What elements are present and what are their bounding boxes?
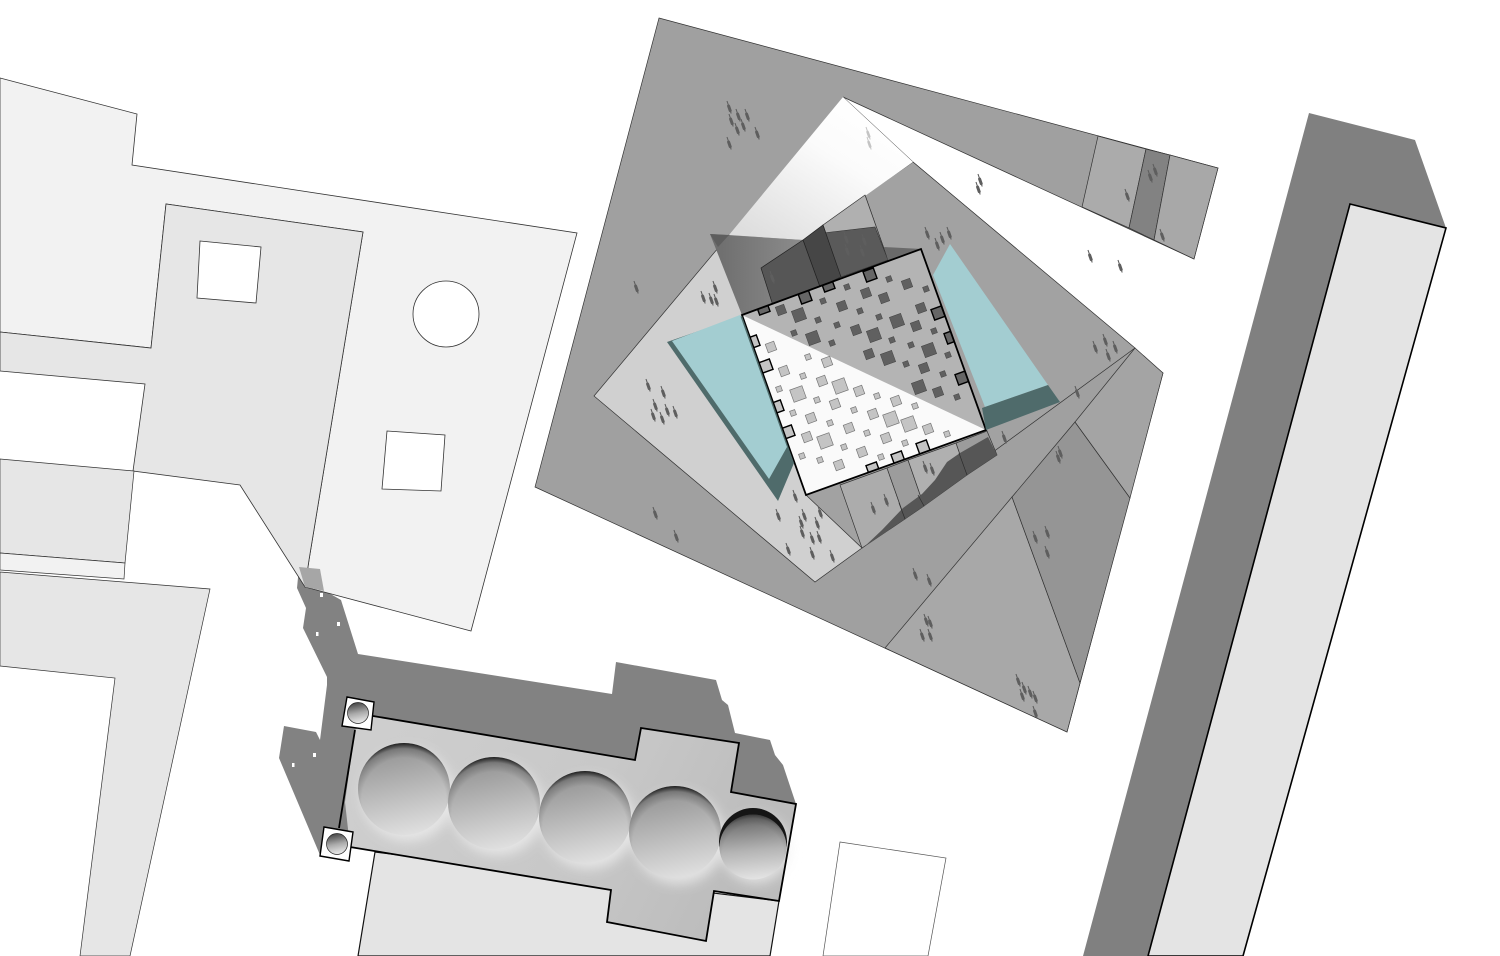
central roof [742,249,986,495]
dome 3 [539,771,631,863]
strip panel 3 [1154,155,1218,259]
south terrace panel 4 [956,431,997,475]
dome 4 [629,786,721,878]
courtyard: lower square [382,431,445,491]
grass tufts [634,101,1164,718]
central building with domes [339,716,796,941]
roof: white half [742,315,986,495]
corner tower: upper [342,697,374,730]
base ground [535,18,1218,732]
shadow on middle lawn [884,247,922,260]
water pool: right [933,244,1060,430]
block B [0,553,125,579]
terrace shaded panel [823,227,888,277]
slab shadow side [1083,113,1446,956]
pool water [933,244,1048,407]
south panel left [885,497,1080,732]
terrace panel left [761,240,820,312]
roof: shaded half [742,249,986,430]
slab roof [1148,204,1446,956]
skylights: dark grid [756,268,969,400]
dome 1 [358,743,450,835]
south panel right [1012,422,1130,683]
corner tower: lower [320,827,353,861]
roof outline [742,249,986,495]
block C [0,572,210,956]
building: below spa [358,852,779,956]
connecting corridor [0,204,363,587]
site plaza [535,18,1218,732]
courtyard: round [413,281,479,347]
shadow seen through corridor [299,567,324,591]
terrace light panel [823,195,888,277]
courtyard: upper square [197,241,261,303]
shadow on wedge and lawn [710,234,803,315]
building: lower left blocks [0,459,210,956]
roof outline [339,716,796,941]
light lawn [594,235,862,582]
south panel corner [1075,348,1163,498]
building: small white outline [823,842,946,956]
dome 5 [719,808,787,880]
block A [0,459,134,563]
dome 2 [448,757,540,849]
south terrace panel 1 [840,468,905,548]
large slab building on right [1083,113,1446,956]
roof slab [345,716,796,941]
strip panel 1 [1082,136,1146,228]
pool edge [667,316,794,501]
dome glows [362,749,790,884]
skylights: light grid [746,335,950,476]
upper left wing [0,78,577,631]
south terrace shadow [864,437,997,547]
building: upper left complex [0,78,577,631]
south terrace panel 3 [908,443,967,506]
white wedge [729,97,913,240]
shadow specks [292,593,340,767]
pool water [672,315,787,479]
middle lawn [806,162,1135,548]
strip panel 2 [1129,149,1170,240]
pool edge [982,385,1060,430]
south terrace panel 2 [887,460,924,519]
north terrace and building shadow [710,195,922,315]
cast shadow of central building [279,567,796,855]
water pool: left [667,315,794,501]
terrace panel dark [803,225,841,287]
shadow on base ground [710,234,729,247]
